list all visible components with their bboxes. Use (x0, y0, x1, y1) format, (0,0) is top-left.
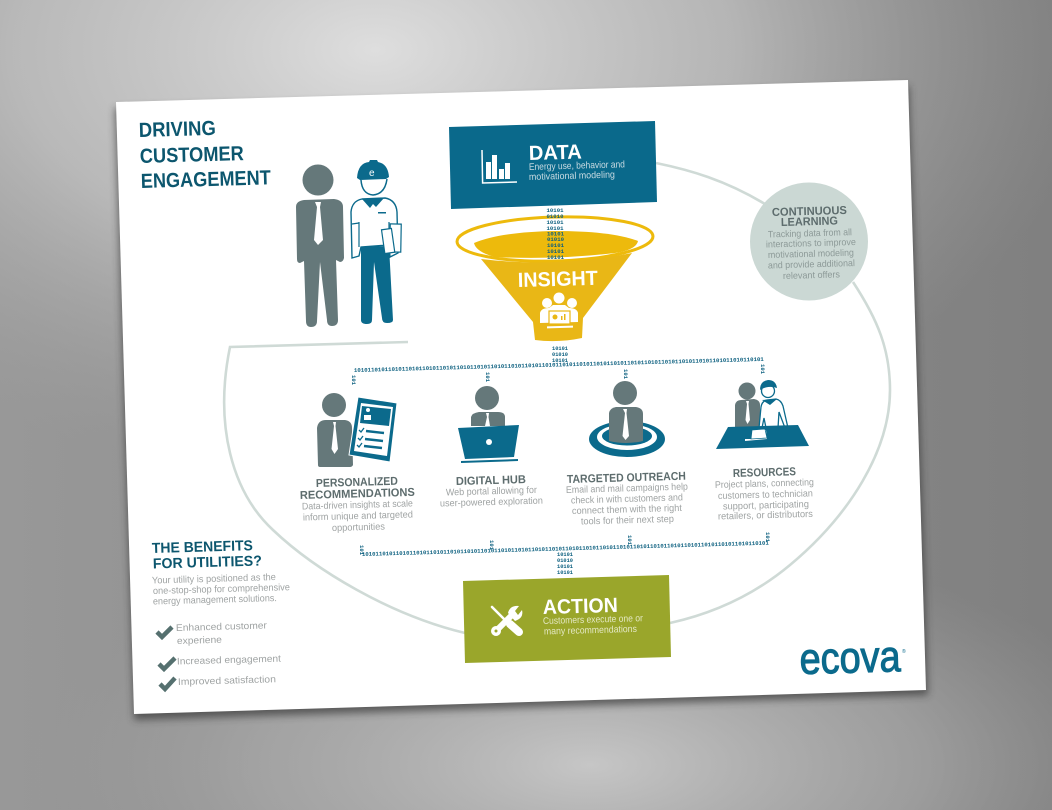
panel: the benefits for utilities: Your utility is positioned as the (152, 572, 276, 586)
binary stream: options to action: 10101 (557, 563, 574, 570)
callout: continuous learning: CONTINUOUS (772, 205, 847, 219)
logo: ecova: ecova (799, 632, 902, 684)
panel: the benefits for utilities: one-stop-shop for comprehensive (153, 582, 290, 597)
binary stream: options to action: 101 (764, 532, 771, 543)
icon: crossed tools (491, 606, 522, 636)
panel: resources: retailers, or distributors (718, 509, 813, 522)
panel: digital hub (440, 386, 543, 509)
callout: continuous learning: and provide additional (768, 257, 855, 270)
binary stream: funnel to options: 10101 (552, 345, 569, 352)
binary stream: data into funnel: 10101 (547, 248, 565, 255)
panel: digital hub: user-powered exploration (440, 496, 543, 509)
icon: bar chart (482, 150, 517, 183)
binary stream: data into funnel: 10101 (546, 219, 564, 226)
panel: targeted outreach: TARGETED OUTREACH (567, 471, 686, 486)
binary stream: options to action: 101011010110101101011010110101101011010110101101011010110101101011010110101101011010110101101011010110101101011010110101 (362, 540, 770, 558)
icon: person at laptop (458, 386, 519, 463)
title: ENGAGEMENT (140, 166, 271, 193)
panel: data: motivational modeling (529, 170, 615, 183)
panel: action (463, 575, 671, 663)
binary stream: data into funnel: 10101 (547, 254, 565, 261)
panel: digital hub: Web portal allowing for (446, 485, 538, 498)
icon: person in target (589, 381, 665, 457)
panel: personalized recommendations: PERSONALIZED (316, 476, 398, 490)
binary stream: data into funnel: 10101 (547, 230, 565, 238)
binary stream: options to action: 10101 (557, 551, 574, 558)
title: DRIVING (138, 117, 216, 142)
callout: continuous learning: interactions to improve (766, 236, 856, 249)
binary stream: funnel to options: 101 (622, 369, 629, 380)
icon: team with laptop (540, 292, 578, 328)
panel: the benefits for utilities: THE BENEFITS (152, 538, 253, 557)
panel: resources (715, 380, 814, 522)
list item: enhanced customer experience: Enhanced customer (176, 620, 268, 634)
icon: person with tablet (317, 393, 397, 467)
panel: personalized recommendations: RECOMMENDATIONS (300, 487, 415, 502)
list item: improved satisfaction: Improved satisfaction (178, 674, 276, 688)
binary stream: funnel to options: 101 (484, 372, 491, 383)
icon: two people at table (716, 380, 809, 449)
engagement loop curve (224, 163, 890, 633)
binary stream: funnel to options (350, 345, 766, 386)
panel: the benefits for utilities: energy management solutions. (153, 593, 277, 607)
panel: the benefits for utilities: FOR UTILITIES? (153, 553, 262, 572)
binary stream: funnel to options: 01010 (552, 351, 569, 358)
binary stream: options to action: 10101 (557, 569, 574, 576)
panel: personalized recommendations: opportunities (332, 522, 385, 534)
title (138, 117, 271, 193)
list item: increased engagement: Increased engagement (177, 654, 281, 667)
binary stream: options to action: 101 (358, 545, 365, 556)
binary stream: data into funnel: 01010 (546, 213, 564, 220)
binary stream: data into funnel: 10101 (546, 225, 564, 232)
panel: action: many recommendations (544, 624, 637, 637)
title: CUSTOMER (139, 142, 244, 168)
panel: targeted outreach (566, 381, 688, 527)
icon: technician figure (351, 160, 401, 324)
panel: resources: RESOURCES (733, 466, 796, 480)
binary stream: funnel to options: 101 (759, 364, 766, 375)
binary stream: funnel to options: 101 (350, 375, 357, 386)
binary stream: options to action: 101 (626, 535, 633, 546)
panel: data: DATA (528, 141, 582, 165)
binary stream: data into funnel (546, 207, 565, 261)
panel: targeted outreach: tools for their next step (581, 514, 674, 527)
funnel: insight (456, 214, 654, 341)
panel: targeted outreach: check in with customers and (571, 492, 683, 506)
callout: continuous learning: LEARNING (781, 215, 838, 229)
callout: continuous learning: relevant offers (783, 268, 840, 281)
panel: data: Energy use, behavior and (529, 159, 625, 173)
panel: targeted outreach: connect them with the right (572, 503, 682, 517)
callout: continuous learning: Tracking data from all (768, 226, 852, 239)
callout: continuous learning (750, 182, 868, 300)
callout: continuous learning: motivational modeling (768, 247, 854, 260)
binary stream: data into funnel: 10101 (546, 207, 564, 214)
list item: enhanced customer experience: experiene (177, 635, 222, 647)
binary stream: options to action (358, 532, 771, 576)
panel: resources: customers to technician (718, 488, 813, 502)
paper sheet (115, 80, 928, 720)
panel: resources: Project plans, connecting (715, 477, 814, 491)
panel: action: ACTION (542, 594, 618, 619)
icon: customer and technician (296, 160, 401, 327)
binary stream: data into funnel: 10101 (547, 242, 565, 249)
panel: personalized recommendations: inform unique and targeted (303, 509, 413, 523)
binary stream: funnel to options: 101011010110101101011010110101101011010110101101011010110101101011010110101101011010110101101011010110101101011010110101 (354, 356, 765, 374)
binary stream: data into funnel: 01010 (547, 236, 565, 243)
panel: targeted outreach: Email and mail campaigns help (566, 482, 688, 496)
list item: enhanced customer experience (157, 620, 268, 647)
panel: resources: support, participating (723, 499, 809, 512)
panel: data (449, 121, 657, 209)
panel: personalized recommendations: Data-driven insights at scale (302, 498, 413, 512)
icon: customer figure (296, 164, 344, 327)
panel: action: Customers execute one or (543, 613, 644, 627)
panel: digital hub: DIGITAL HUB (456, 474, 526, 488)
panel: personalized recommendations (300, 393, 415, 534)
binary stream: options to action: 01010 (557, 557, 574, 564)
binary stream: options to action: 101 (488, 540, 495, 551)
binary stream: funnel to options: 10101 (552, 357, 569, 364)
funnel: insight: INSIGHT (517, 267, 599, 292)
icon: technician figure: e (369, 168, 375, 179)
logo: ecova: ® (902, 648, 906, 655)
panel: the benefits for utilities (152, 538, 290, 689)
